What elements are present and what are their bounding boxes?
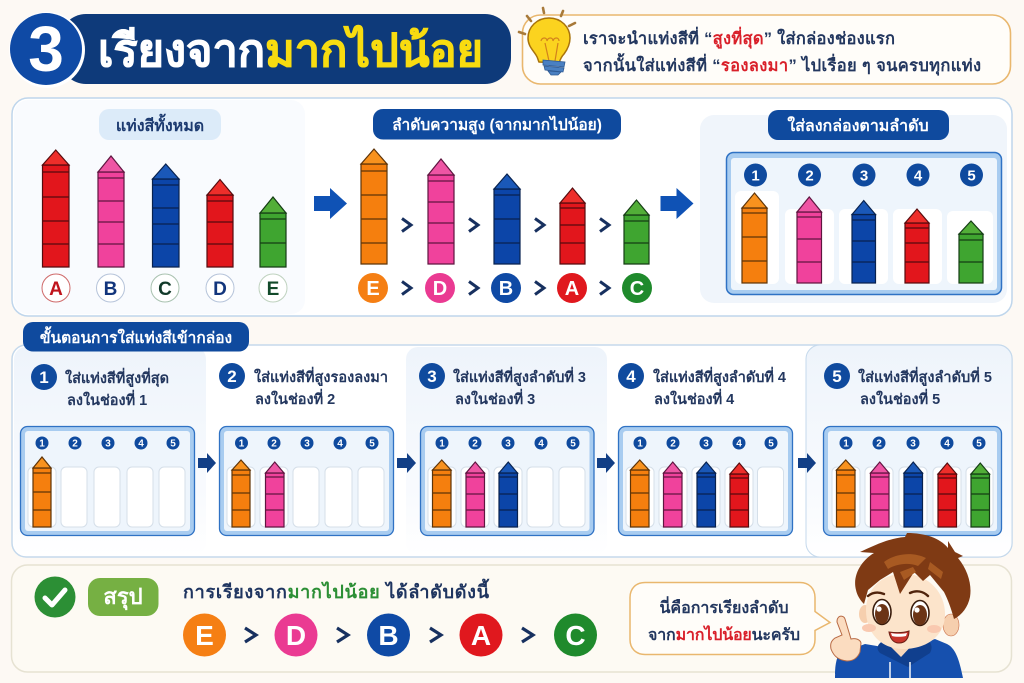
label: height order bbox=[373, 109, 621, 140]
order circles bbox=[358, 273, 652, 303]
steps heading tab bbox=[23, 322, 249, 352]
sorted box: 3 bbox=[860, 168, 868, 184]
section: height order bbox=[358, 109, 652, 303]
letter E bbox=[259, 274, 287, 302]
bar E orange bbox=[361, 149, 387, 264]
order circles: C bbox=[630, 278, 644, 300]
header banner bbox=[9, 12, 511, 88]
tip box bbox=[519, 8, 1010, 84]
letter C bbox=[151, 274, 179, 302]
arrow bbox=[314, 188, 347, 219]
step 4 bbox=[618, 363, 792, 536]
final order: D bbox=[286, 620, 306, 651]
label: put in box bbox=[768, 110, 949, 140]
arrow bbox=[798, 453, 816, 473]
letter E: E bbox=[267, 279, 279, 300]
step 5 bbox=[824, 363, 1002, 536]
bar A red bbox=[560, 188, 585, 264]
sorted box: 5 bbox=[967, 168, 976, 184]
step 2: 3 bbox=[304, 438, 310, 450]
step 5: 5 bbox=[832, 367, 842, 386]
step 2: 2 bbox=[271, 438, 277, 450]
bar D pink bbox=[428, 159, 454, 264]
step 2 bbox=[219, 363, 394, 536]
order circles: A bbox=[565, 278, 579, 300]
summary label bbox=[88, 578, 158, 616]
step 4: 1 bbox=[637, 438, 643, 450]
arrow bbox=[397, 453, 416, 473]
step 2: ใส่แท่งสีที่สูงรองลงมา bbox=[254, 366, 388, 386]
arrow bbox=[198, 453, 216, 473]
step 1: 5 bbox=[170, 438, 176, 450]
bar B blue bbox=[494, 174, 520, 264]
step 1: ใส่แท่งสีที่สูงที่สุด bbox=[65, 367, 169, 387]
step 2: 1 bbox=[239, 438, 245, 450]
tip text line 2: จากนั้นใส่แท่งสีที่ “รองลงมา” ไปเรื่อย ๆ จนครบทุกแท่ง bbox=[583, 53, 981, 76]
step 1: 4 bbox=[138, 438, 144, 450]
step 1: ลงในช่องที่ 1 bbox=[67, 389, 147, 409]
letter A: A bbox=[49, 279, 63, 300]
speech bubble bbox=[630, 582, 830, 654]
number badge bbox=[9, 12, 85, 88]
letter A bbox=[42, 274, 70, 302]
step 5: 4 bbox=[944, 438, 950, 450]
sorted box: 4 bbox=[914, 168, 923, 184]
bar D bbox=[207, 180, 233, 267]
step 4: 4 bbox=[736, 438, 742, 450]
label: all bars: แท่งสีทั้งหมด bbox=[116, 113, 204, 135]
step 1: 1 bbox=[39, 368, 49, 387]
step 3: ลงในช่องที่ 3 bbox=[455, 388, 535, 408]
steps heading tab: ขั้นตอนการใส่แท่งสีเข้ากล่อง bbox=[40, 326, 232, 347]
character: boy bbox=[831, 533, 970, 678]
step 3: 1 bbox=[439, 438, 445, 450]
final order: A bbox=[471, 620, 491, 651]
arrow bbox=[597, 453, 615, 473]
letter B: B bbox=[104, 279, 117, 300]
chevrons bbox=[402, 218, 609, 294]
letter D bbox=[206, 274, 234, 302]
step 4: ใส่แท่งสีที่สูงลำดับที่ 4 bbox=[653, 366, 786, 386]
step 5: 2 bbox=[876, 438, 882, 450]
letter D: D bbox=[213, 279, 227, 300]
number badge: 3 bbox=[28, 13, 64, 85]
step 1 bbox=[20, 364, 194, 536]
panel: summary bbox=[12, 533, 1012, 678]
order circles: B bbox=[499, 278, 513, 300]
final order: E bbox=[195, 620, 214, 651]
step 3 bbox=[419, 363, 594, 536]
label: height order: ลำดับความสูง (จากมากไปน้อย) bbox=[392, 115, 602, 136]
step 3: 4 bbox=[538, 438, 544, 450]
summary label: สรุป bbox=[103, 584, 143, 611]
letter C: C bbox=[158, 279, 172, 300]
speech bubble: จากมากไปน้อยนะครับ bbox=[648, 625, 800, 644]
final order: C bbox=[565, 620, 586, 651]
step 5: 1 bbox=[843, 438, 849, 450]
step 2: 2 bbox=[227, 367, 237, 386]
tip text: เราจะนำแท่งสีที่ “สูงที่สุด” ใส่กล่องช่องแรก bbox=[583, 26, 895, 50]
section: all bars bbox=[42, 109, 287, 302]
panel: steps bbox=[12, 322, 1012, 557]
step 4: 5 bbox=[768, 438, 774, 450]
panel: sorting overview bbox=[12, 98, 1012, 316]
icon: check bbox=[34, 576, 76, 618]
arrow bbox=[660, 188, 694, 219]
step 3: 3 bbox=[505, 438, 511, 450]
bar C bbox=[152, 164, 179, 267]
label: all bars bbox=[99, 109, 221, 140]
order circles: D bbox=[433, 278, 447, 300]
step 2: 5 bbox=[369, 438, 375, 450]
step 4: ลงในช่องที่ 4 bbox=[654, 388, 734, 408]
title: เรียงจากมากไปน้อย bbox=[98, 24, 483, 76]
summary text: การเรียงจากมากไปน้อย ได้ลำดับดังนี้ bbox=[183, 578, 490, 602]
step 3: ใส่แท่งสีที่สูงลำดับที่ 3 bbox=[453, 366, 586, 386]
step 5: ลงในช่องที่ 5 bbox=[860, 388, 940, 408]
step 1: 1 bbox=[39, 438, 45, 450]
step 1: 3 bbox=[105, 438, 111, 450]
section: put in box bbox=[726, 110, 1002, 294]
step 3: 3 bbox=[427, 367, 437, 386]
final order: B bbox=[378, 620, 399, 651]
label: put in box: ใส่ลงกล่องตามลำดับ bbox=[787, 116, 929, 135]
sorted box: 1 bbox=[751, 168, 760, 184]
final order bbox=[183, 614, 597, 656]
step 5: 3 bbox=[910, 438, 916, 450]
letter B bbox=[96, 274, 124, 302]
step 4: 3 bbox=[703, 438, 709, 450]
order circles: E bbox=[366, 278, 380, 300]
bar E bbox=[260, 197, 286, 267]
step 5: ใส่แท่งสีที่สูงลำดับที่ 5 bbox=[858, 366, 992, 386]
step 4: 4 bbox=[626, 367, 636, 386]
icon: light bulb bbox=[519, 8, 575, 75]
speech bubble: นี่คือการเรียงลำดับ bbox=[660, 596, 789, 617]
step 3: 5 bbox=[570, 438, 576, 450]
step 2: 4 bbox=[337, 438, 343, 450]
bar C green bbox=[624, 200, 649, 264]
sorted box: 2 bbox=[805, 168, 814, 184]
sorted box bbox=[726, 152, 1002, 294]
step 4: 2 bbox=[670, 438, 676, 450]
step 5: 5 bbox=[976, 438, 982, 450]
step 2: ลงในช่องที่ 2 bbox=[255, 388, 335, 408]
bar B bbox=[98, 156, 124, 267]
bar A bbox=[42, 150, 69, 267]
step 1: 2 bbox=[72, 438, 78, 450]
step 3: 2 bbox=[472, 438, 478, 450]
